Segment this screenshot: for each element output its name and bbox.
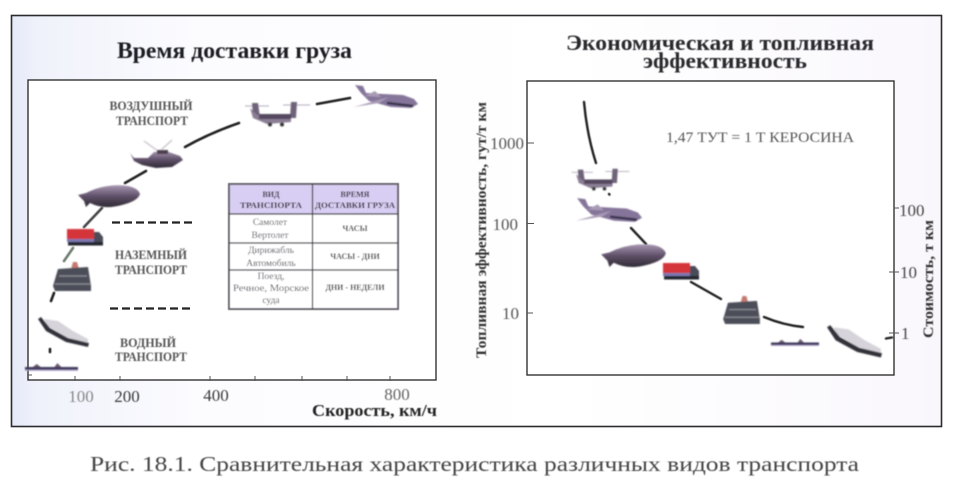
right axis labels: 1 [901, 324, 910, 343]
table: transport type and delivery time: ЧАСЫ - ДНИ [330, 252, 381, 261]
panel: outer frame [12, 16, 942, 426]
x axis tick labels: 800 [384, 385, 410, 404]
table: transport type and delivery time: ДОСТАВКИ ГРУЗА [315, 201, 395, 210]
table: transport type and delivery time: ДНИ - НЕДЕЛИ [325, 283, 385, 292]
icon: cargo plane [354, 85, 418, 108]
icon: tiltrotor [572, 169, 629, 191]
heading: delivery time: Время доставки груза [117, 38, 353, 63]
heading: economic and fuel efficiency: эффективность [643, 48, 807, 73]
icon: airship [78, 185, 140, 207]
label: ground transport [115, 248, 188, 277]
right axis title: Стоимость, т км [921, 220, 937, 338]
icon: barge [771, 339, 819, 346]
x axis ticks [28, 375, 390, 381]
dashed separator: air and ground [112, 221, 193, 224]
table: transport type and delivery time: Речное, Морское [233, 284, 309, 294]
table: transport type and delivery time: ЧАСЫ [343, 224, 368, 233]
label: ground transport: НАЗЕМНЫЙ [115, 248, 187, 262]
dashed separator: ground and water [110, 307, 191, 310]
left axis labels [490, 134, 524, 323]
label: air transport [110, 99, 193, 128]
icon: train [723, 296, 760, 324]
curve segments [584, 102, 892, 338]
table: transport type and delivery time: Вертолет [252, 231, 289, 241]
label: water transport: ТРАНСПОРТ [115, 350, 188, 364]
curve segments [50, 98, 350, 352]
right axis ticks [889, 208, 899, 333]
table: transport type and delivery time: суда [262, 296, 280, 306]
heading: economic and fuel efficiency: Экономическая и топливная [566, 30, 874, 55]
note: kerosene equivalence: 1,47 ТУТ = 1 Т КЕРОСИНА [666, 130, 855, 146]
icon: tiltrotor [245, 102, 310, 126]
table: transport type and delivery time [229, 184, 398, 309]
icon: helicopter [130, 140, 183, 168]
label: water transport: ВОДНЫЙ [120, 336, 176, 350]
chart frame [527, 81, 894, 375]
left axis ticks [527, 143, 534, 313]
panel: efficiency chart [474, 81, 937, 375]
icon: train [53, 262, 91, 291]
icon: barge [25, 363, 78, 370]
panel: delivery time chart [25, 80, 437, 420]
table: transport type and delivery time: ВРЕМЯ [341, 190, 370, 199]
left axis title: Топливная эффективность, гут/т км [474, 102, 490, 358]
x axis tick labels: 200 [114, 387, 140, 406]
icon: airship [601, 244, 666, 267]
chart frame [28, 80, 436, 380]
table: transport type and delivery time: Дирижабль [248, 245, 295, 256]
icon: truck [67, 229, 103, 246]
label: air transport: ВОЗДУШНЫЙ [110, 99, 193, 113]
heading: economic and fuel efficiency [566, 30, 874, 73]
left axis labels: 1000 [490, 134, 524, 153]
right axis labels: 100 [899, 201, 924, 220]
x axis tick labels [68, 385, 410, 406]
label: ground transport: ТРАНСПОРТ [115, 263, 188, 277]
table: transport type and delivery time: ВИД [262, 190, 280, 199]
table: transport type and delivery time: Самолет [253, 218, 288, 228]
x axis tick labels: 100 [68, 387, 94, 406]
right axis labels [899, 201, 924, 343]
left axis labels: 100 [492, 215, 518, 234]
label: water transport [115, 336, 188, 364]
icon: cargo plane [576, 198, 642, 222]
x axis title: speed: Скорость, км/ч [312, 401, 437, 420]
icon: truck [663, 263, 699, 280]
table: transport type and delivery time: Автомобиль [246, 258, 296, 269]
label: air transport: ТРАНСПОРТ [116, 114, 189, 128]
caption: Рис. 18.1. Сравнительная характеристика различных видов транспорта [90, 452, 860, 476]
table: transport type and delivery time: Поезд, [258, 272, 284, 282]
right axis labels: 10 [900, 263, 917, 282]
x axis tick labels: 400 [203, 386, 229, 405]
table: transport type and delivery time: ТРАНСПОРТА [240, 201, 302, 210]
left axis labels: 10 [502, 304, 519, 323]
icon: ship [827, 320, 882, 357]
icon: ship [38, 312, 89, 347]
